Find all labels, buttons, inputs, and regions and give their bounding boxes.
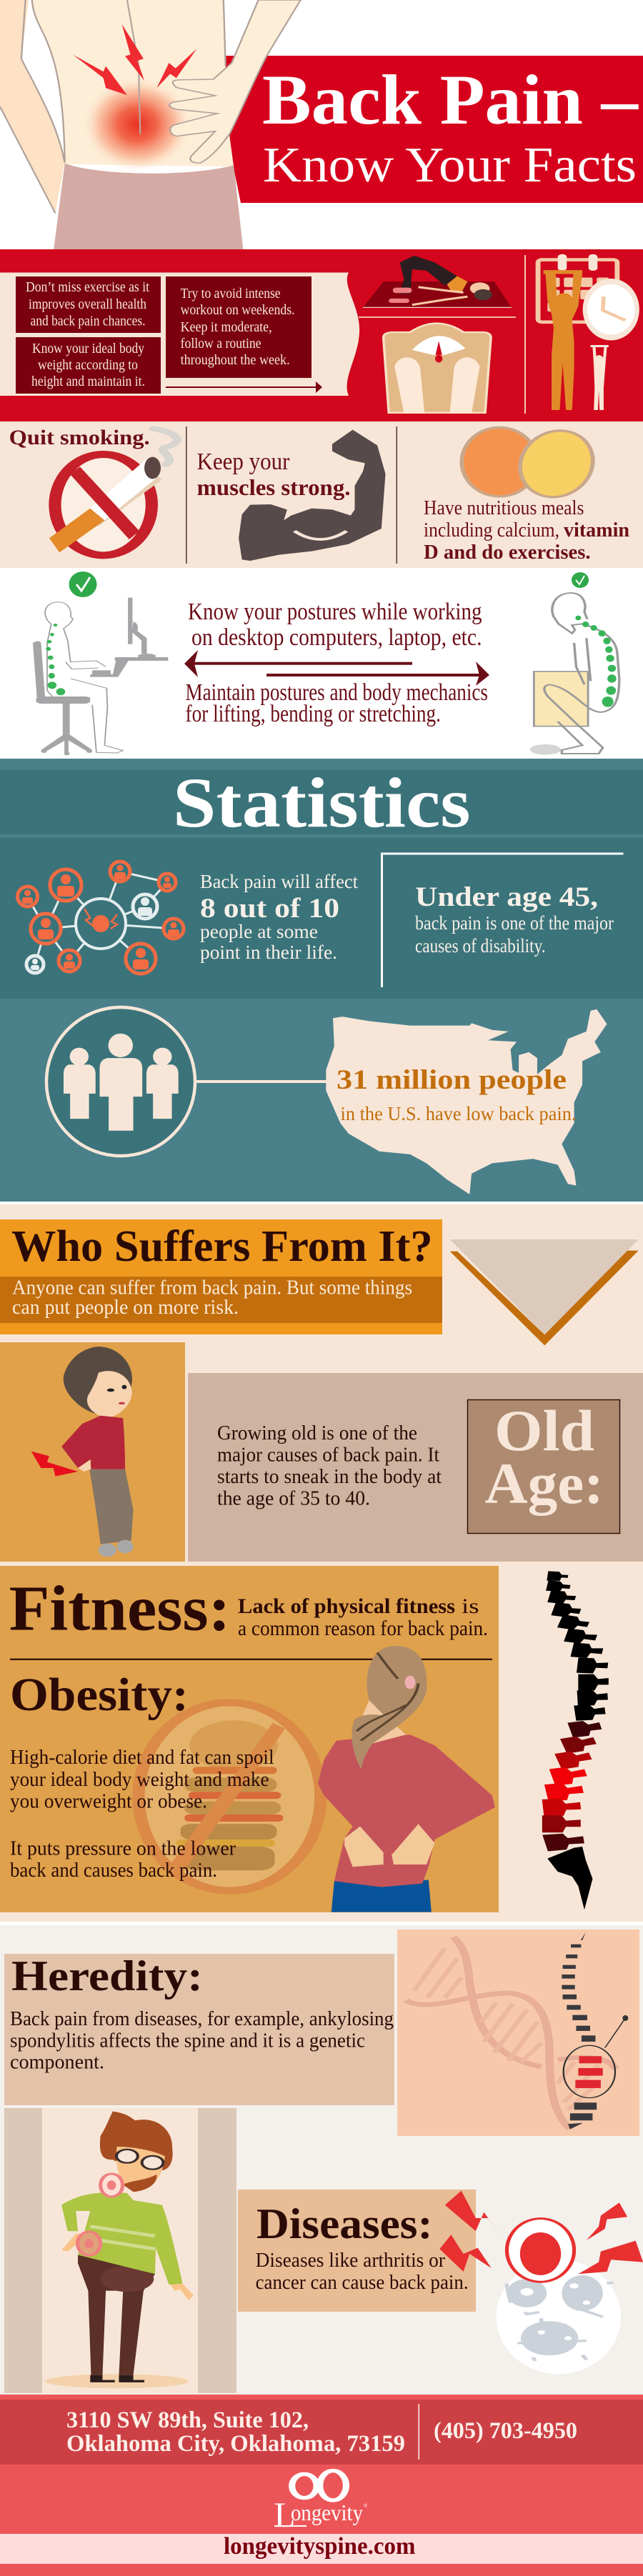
panel: heredity text: Back pain from diseases, for example, ankylosing [10,2008,394,2030]
text: fitness: Fitness: [9,1574,231,1644]
panel: heredity and diseases [0,1922,643,2395]
text: desk posture: on desktop computers, laptop, etc. [191,624,482,651]
text: obesity: back and causes back pain. [10,1859,217,1882]
logo: ongevity [291,2500,363,2525]
text: body mechanics: for lifting, bending or stretching. [186,701,441,727]
illustration: DNA and spine [397,1929,639,2136]
text: under age 45 [415,882,614,957]
text: nutritious meals: Have nutritious meals [424,496,584,519]
text: nutritious meals: D and do exercises. [424,541,591,564]
heading: quit smoking: Quit smoking. [9,426,150,449]
text: 8 out of 10: Back pain will affect [200,871,358,892]
text: keep your muscles strong: Keep your [197,449,290,475]
text: obesity: your ideal body weight and make [10,1769,269,1791]
icon: woman doing bridge on mat [363,256,512,308]
illustration: squatting lifting posture [530,593,619,755]
illustration: woman holding lower back [318,1646,495,1912]
illustration: man with pain [4,2108,236,2393]
panel: old age: Old [494,1398,594,1463]
title text: Know Your Facts [263,138,637,193]
text: under age 45: Under age 45, [415,882,598,912]
phone: (405) 703-4950 [434,2418,577,2444]
panel: old woman illustration [0,1342,185,1562]
address [66,2407,405,2457]
text: desk posture [188,599,482,651]
icon: no smoking sign [49,429,177,555]
logo [274,2471,368,2535]
heading banner [0,1219,442,1334]
footer [0,2395,643,2576]
arrow [166,381,322,393]
title text [262,60,639,193]
heading banner: can put people on more risk. [12,1297,239,1319]
text: obesity: you overweight or obese. [10,1791,207,1813]
text: fitness: a common reason for back pain. [238,1617,488,1640]
icon: green check right [572,572,589,588]
panel: lifestyle tips [0,421,643,568]
text: 31 million people: in the U.S. have low back pain. [340,1103,576,1124]
text: fitness: Lack of physical fitness [238,1594,455,1618]
text: under age 45: causes of disability. [415,935,546,957]
icon: prohibited burger [139,1702,321,1891]
icon: downward chevron [450,1239,639,1345]
tip: avoid intense workout: Keep it moderate, [181,319,272,335]
cream ribbon [0,273,359,396]
header panel [0,0,643,249]
heading banner: Anyone can suffer from back pain. But some things [12,1277,412,1299]
panel: heredity text: Heredity: [11,1952,203,2000]
panel: old age: the age of 35 to 40. [217,1488,370,1510]
text: nutritious meals: including calcium, [424,519,559,541]
panel: postures [33,571,619,755]
panel: statistics [0,759,643,1202]
arrow: right [266,662,489,686]
text: desk posture: Know your postures while working [188,599,482,625]
panel: diseases text: Diseases: [256,2200,433,2247]
tip: avoid intense workout: Try to avoid intense [181,286,281,301]
tip: ideal body weight [16,337,161,394]
panel: who suffers [0,1204,643,1922]
illustration: seated desk posture [33,598,168,755]
panel: diseases text: Diseases like arthritis or [256,2250,446,2272]
arrow: left [184,650,412,677]
text: keep your muscles strong [197,449,350,500]
icon: three people in circle [46,1007,330,1156]
title text: Back Pain – [262,60,639,139]
text: nutritious meals [424,496,629,564]
text: nutritious meals: vitamin [564,519,629,541]
icon: flexed muscle arm [239,430,386,561]
logo: ® [364,2503,368,2509]
panel: heredity text: component. [10,2052,104,2074]
panel: heredity text: spondylitis affects the spine and it is a genetic [10,2030,365,2052]
illustration: torso with back pain [0,0,301,249]
text: under age 45: back pain is one of the major [415,912,614,934]
text: fitness: is [462,1594,479,1618]
text: fitness [9,1574,488,1644]
text: 8 out of 10 [200,871,358,963]
tip: don't miss exercise: and back pain chances. [30,313,146,329]
icon: nutritious eggs [462,427,599,499]
title banner [221,56,643,203]
tip: don't miss exercise: improves overall health [29,296,146,312]
text: body mechanics [186,679,488,727]
tip: ideal body weight: height and maintain it. [31,374,145,389]
text: keep your muscles strong: muscles strong. [197,474,350,500]
text: obesity [10,1669,274,1882]
icon: people network [17,862,184,974]
heading banner: Who Suffers From It? [11,1222,433,1271]
website: longevityspine.com [224,2533,416,2560]
panel: old age: major causes of back pain. It [217,1444,439,1467]
illustration: spine [542,1571,609,1909]
map: United States [326,1009,607,1194]
text: 31 million people [337,1064,576,1124]
panel: old age: Age: [484,1451,604,1516]
panel: exercise tips [0,249,643,421]
address: Oklahoma City, Oklahoma, 73159 [66,2431,405,2457]
text: obesity: High-calorie diet and fat can spoil [10,1747,274,1769]
panel: diseases text [238,2190,476,2312]
icon: disease target and bacteria [439,2191,643,2374]
icon: weighing scale with feet [384,324,491,413]
heading: Statistics [173,763,470,842]
text: 31 million people: 31 million people [337,1064,567,1095]
panel: old age: Growing old is one of the [217,1422,417,1444]
icon: green check left [69,571,97,597]
tip: avoid intense workout [166,276,311,378]
address: 3110 SW 89th, Suite 102, [66,2407,309,2433]
tip: ideal body weight: weight according to [38,357,138,373]
bracket [382,854,623,987]
text: 8 out of 10: 8 out of 10 [200,893,339,924]
tip: don't miss exercise: Don’t miss exercise as it [26,279,149,295]
tip: avoid intense workout: follow a routine [181,336,261,351]
icon: calendar, clock and exercising figures [538,254,639,410]
panel: diseases text: cancer can cause back pain. [256,2272,469,2294]
tip: avoid intense workout: workout on weekends. [181,302,295,318]
panel: old age [188,1373,643,1562]
tip: don't miss exercise [16,276,161,333]
text: 8 out of 10: people at some [200,921,318,942]
text: 8 out of 10: point in their life. [200,942,337,963]
tip: avoid intense workout: throughout the week. [181,352,290,368]
panel: old age: starts to sneak in the body at [217,1466,442,1488]
panel: heredity text [4,1952,394,2105]
tip: ideal body weight: Know your ideal body [32,341,144,356]
panel: fitness and obesity [0,1566,609,1912]
logo: L [274,2495,296,2535]
text: obesity: Obesity: [10,1669,189,1721]
text: obesity: It puts pressure on the lower [10,1838,236,1860]
text: body mechanics: Maintain postures and body mechanics [186,679,488,706]
